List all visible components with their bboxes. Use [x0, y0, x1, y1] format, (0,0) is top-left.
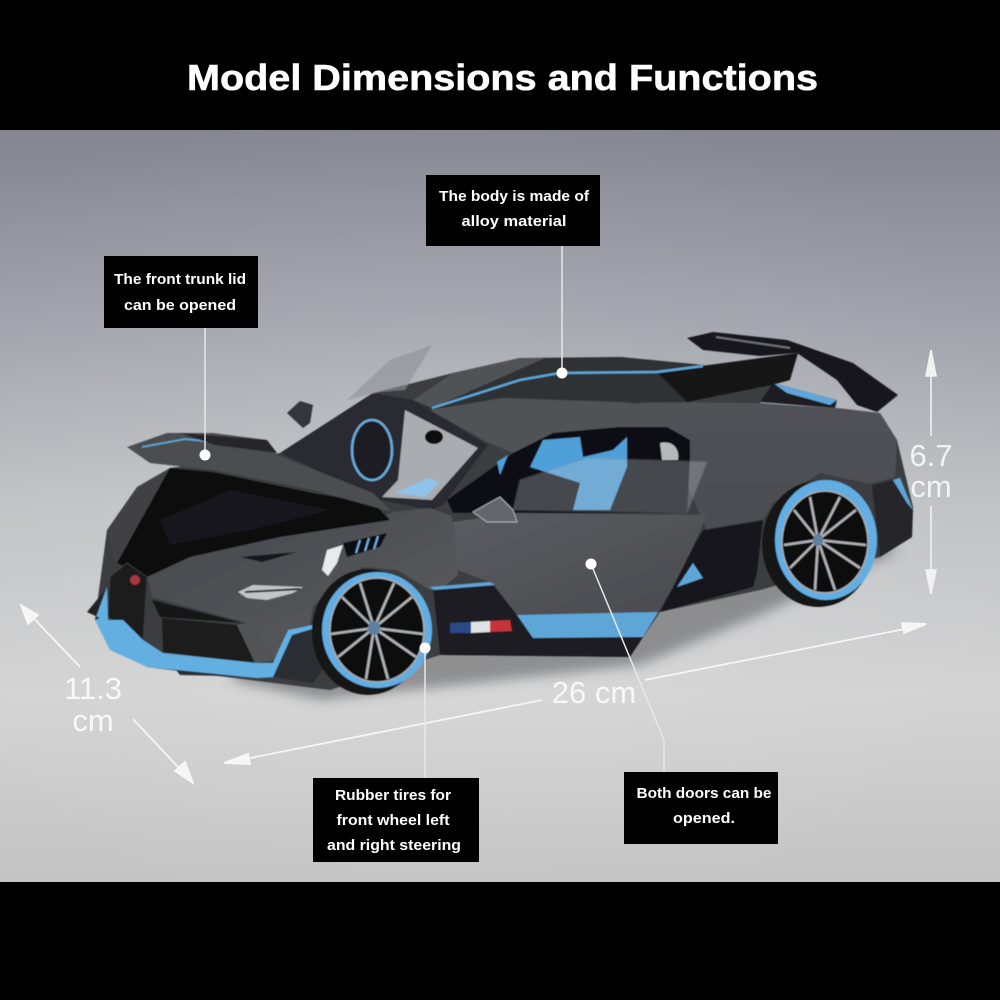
- rear wing: [687, 332, 898, 412]
- rear bumper: [872, 478, 913, 557]
- ground shadow: [230, 540, 900, 700]
- callout: front trunk lid: [104, 256, 258, 460]
- french flag: [450, 620, 512, 633]
- rear quarter panel: [640, 402, 897, 530]
- callout: doors: Both doors can be: [636, 786, 772, 802]
- open hood and engine bay: [107, 433, 392, 577]
- blue seats: [530, 437, 627, 510]
- blue front splitter: [95, 587, 312, 678]
- upper cabin band: [430, 398, 667, 453]
- body base silhouette: [95, 357, 913, 690]
- front wheel: [312, 569, 432, 695]
- title: Model Dimensions and Functions: [187, 57, 818, 98]
- steering wheel ring: [352, 420, 392, 480]
- side vent: [343, 533, 387, 557]
- dimension: height 6.7 cm: [909, 350, 953, 594]
- dimension: width 11.3 cm: cm: [72, 703, 114, 738]
- dimension: height 6.7 cm: cm: [910, 469, 952, 504]
- grille: [108, 563, 147, 643]
- callout: front trunk lid: The front trunk lid: [114, 272, 246, 288]
- callout: doors: opened.: [673, 811, 735, 827]
- door mirror: [473, 497, 517, 522]
- side mirror: [287, 401, 313, 428]
- dimension: width 11.3 cm: 11.3: [64, 671, 122, 706]
- car model: [87, 332, 913, 700]
- callout: body material: The body is made of: [439, 189, 589, 205]
- lower door sill: [430, 582, 658, 657]
- dimension: height 6.7 cm: 6.7: [909, 438, 953, 473]
- front lower bumper: [163, 627, 330, 683]
- blue door strip: [517, 612, 658, 638]
- title banner: [0, 0, 1000, 130]
- dimension: width 11.3 cm: [21, 605, 193, 783]
- door window glass: [513, 458, 707, 513]
- lower intake: [152, 600, 277, 663]
- callout: rubber tires: [313, 642, 479, 862]
- dimension: length 26 cm: 26 cm: [552, 675, 636, 710]
- callout: rubber tires: Rubber tires for: [335, 788, 451, 804]
- badge: [130, 575, 140, 585]
- roof: [413, 353, 798, 410]
- windshield: [280, 345, 488, 510]
- bottom band: [0, 882, 1000, 1000]
- behind door dark sill: [660, 520, 763, 612]
- callout: body material: alloy material: [462, 214, 566, 230]
- headlight: [238, 545, 343, 600]
- callout: front trunk lid: can be opened: [124, 298, 236, 314]
- front fender and nose: [147, 508, 458, 660]
- open door: [453, 497, 707, 615]
- callout: body material: [426, 175, 600, 378]
- rear wheel: [762, 480, 877, 607]
- callout: doors: [586, 558, 778, 844]
- dimension: length 26 cm: [224, 623, 926, 764]
- callout: rubber tires: front wheel left: [336, 813, 450, 829]
- callout: rubber tires: and right steering: [327, 838, 461, 854]
- rear view mirror: [425, 430, 443, 444]
- cabin opening interior: [447, 427, 690, 513]
- photo background: [0, 130, 1000, 882]
- raised door glass: [347, 345, 432, 400]
